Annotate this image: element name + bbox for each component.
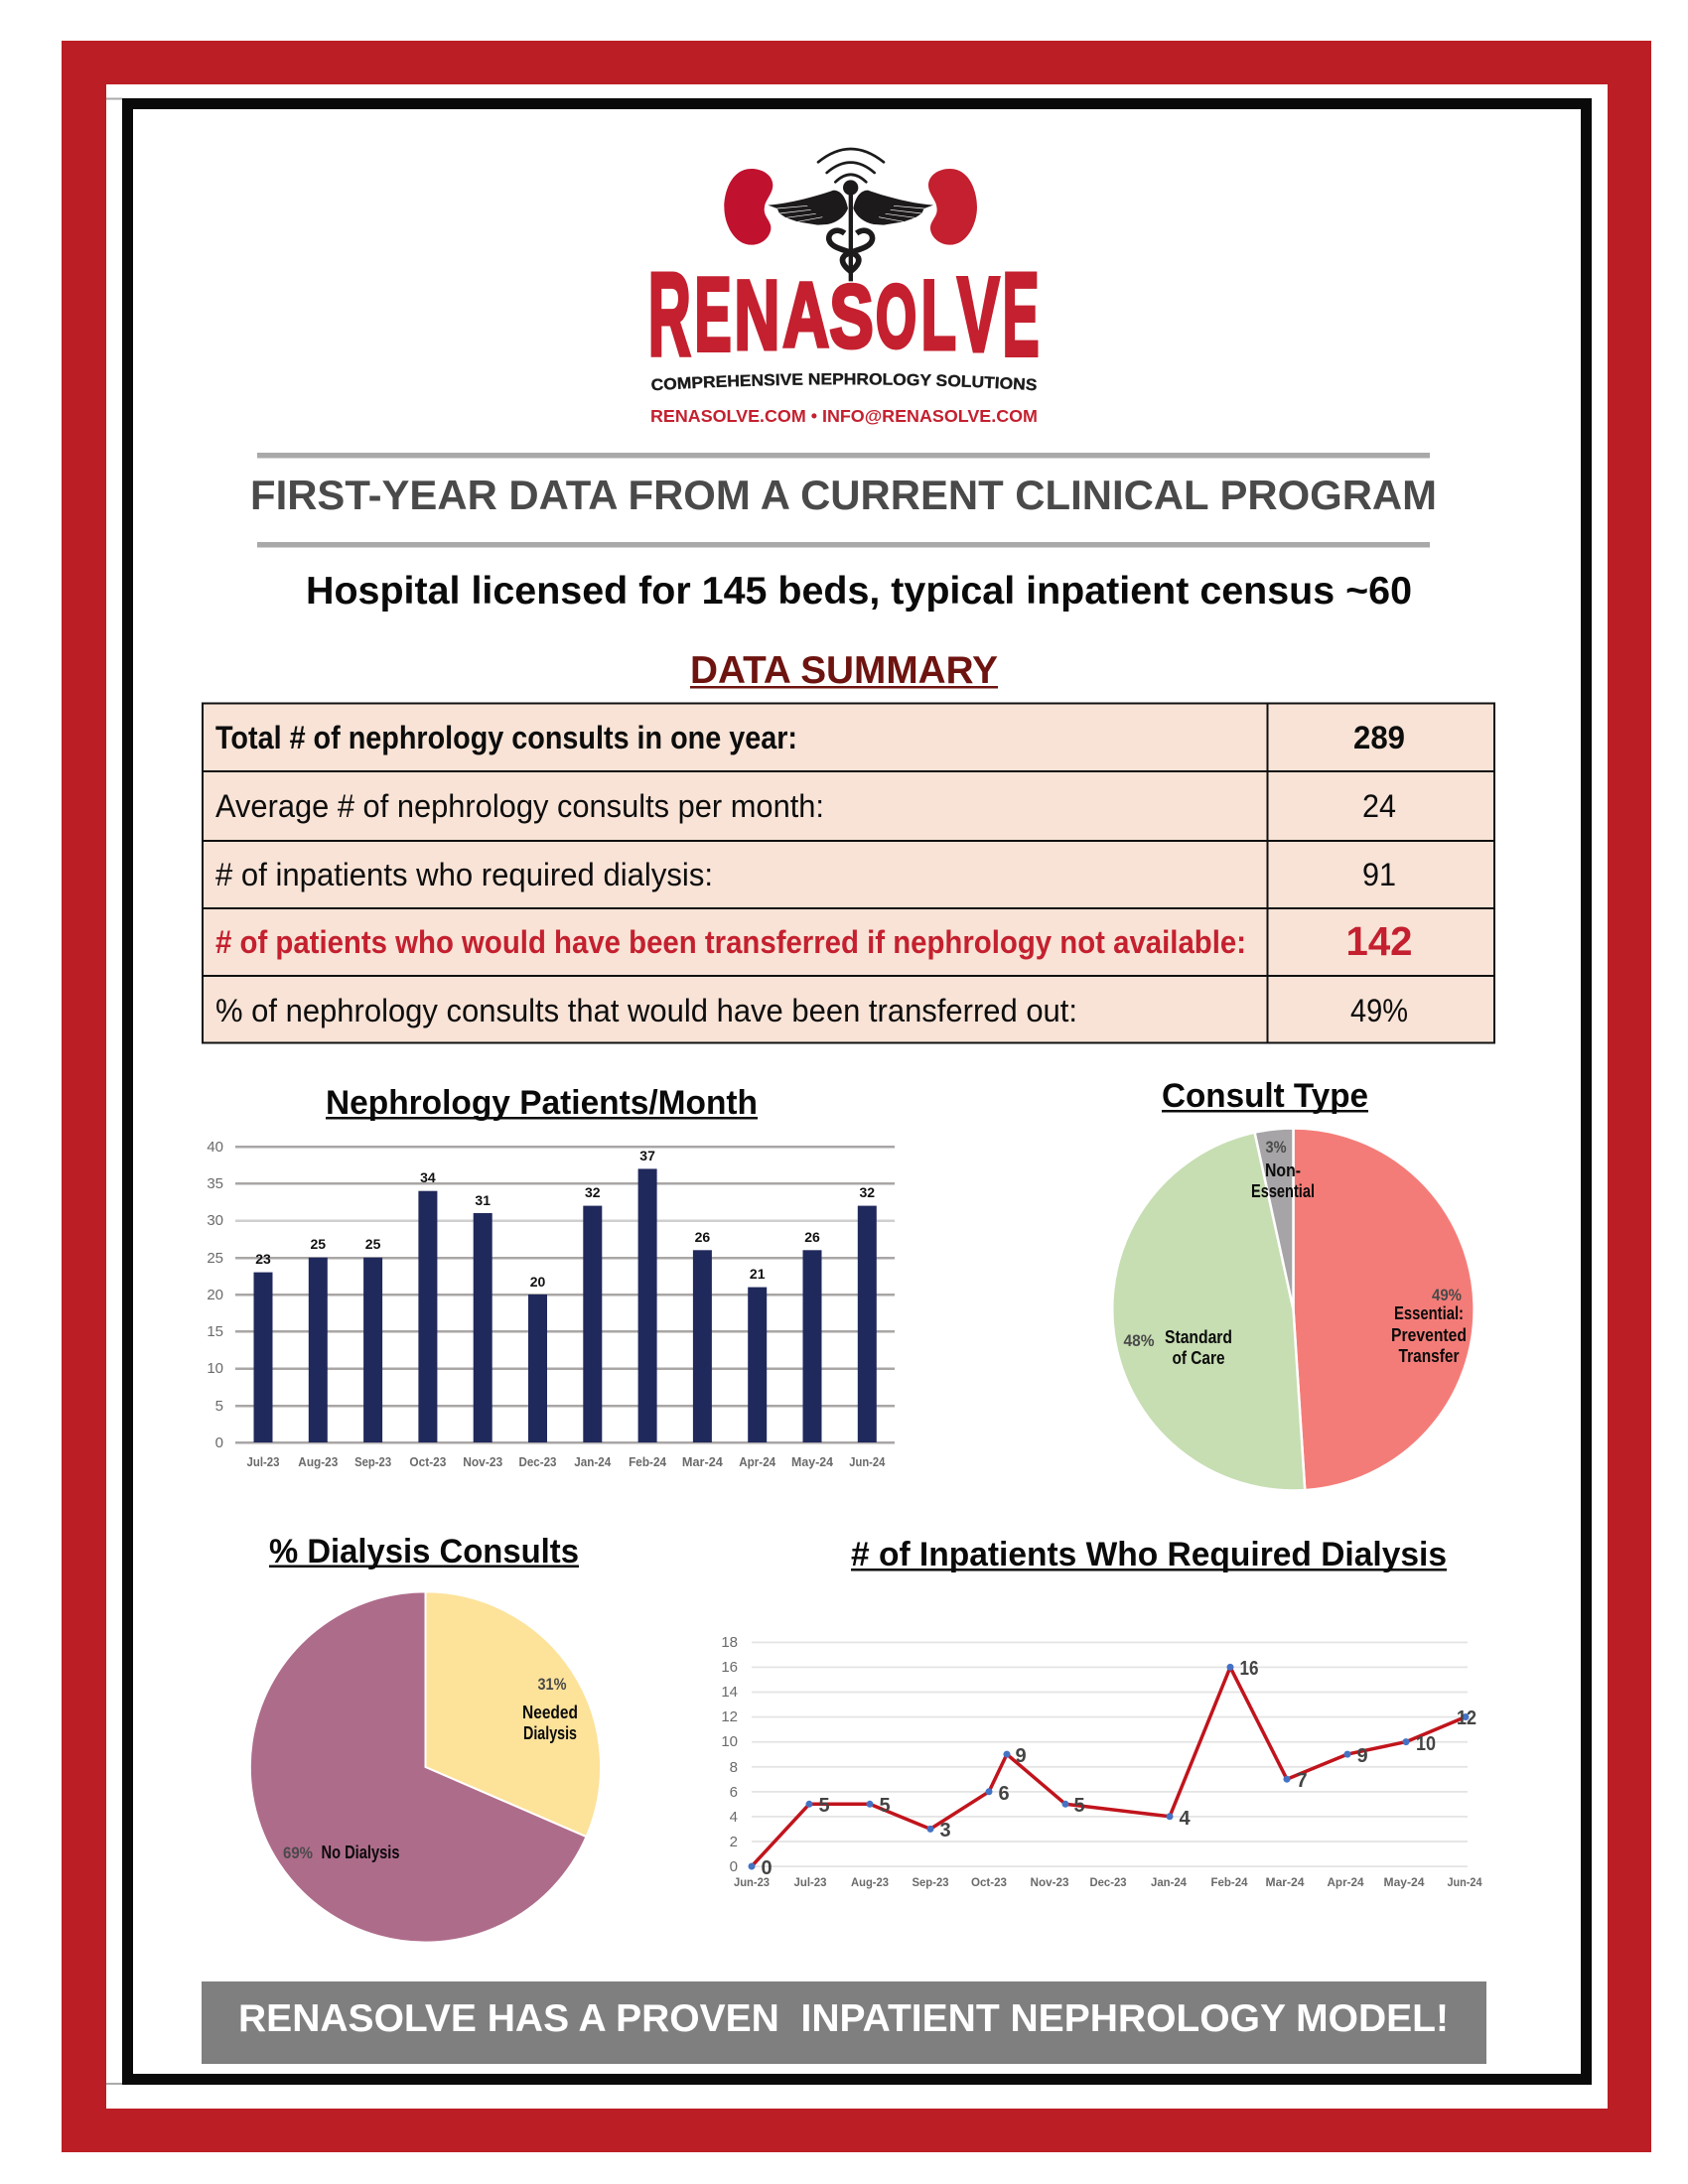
y axis labels (207, 1139, 223, 1451)
logo wordmark: O (876, 268, 916, 367)
label: no dialysis: 69% (283, 1843, 313, 1862)
data labels: 4 (1179, 1808, 1191, 1830)
month labels: Sep-23 (912, 1875, 949, 1889)
bar value labels: 25 (365, 1236, 381, 1252)
y axis labels: 14 (721, 1684, 738, 1701)
bar value labels: 31 (475, 1192, 491, 1208)
banner: proven inpatient nephrology model (202, 1981, 1486, 2064)
y axis labels: 35 (207, 1175, 223, 1192)
logo tagline: COMPREHENSIVE NEPHROLOGY SOLUTIONS (651, 373, 1037, 391)
logo wordmark: V (957, 255, 1000, 374)
data labels: 9 (1015, 1745, 1027, 1767)
label: no dialysis: No Dialysis (322, 1843, 399, 1862)
month labels (734, 1875, 1482, 1889)
y axis labels: 6 (730, 1784, 738, 1801)
bar value labels: 26 (695, 1229, 710, 1245)
label: needed dialysis (522, 1675, 578, 1743)
month labels: Jul-23 (794, 1875, 827, 1889)
row: average consults: 24 (1362, 788, 1396, 824)
label: standard of care: 48% (1124, 1331, 1154, 1350)
row: percent transferred: % of nephrology consults that would have been transferred out: (215, 993, 1077, 1028)
label: essential: Prevented (1391, 1325, 1467, 1345)
bar value labels: 32 (585, 1184, 601, 1200)
month labels: Nov-23 (1031, 1875, 1069, 1889)
y axis labels: 16 (721, 1659, 738, 1676)
month labels: Nov-23 (463, 1454, 502, 1469)
y axis labels: 12 (721, 1708, 738, 1725)
row: dialysis inpatients (215, 857, 1396, 892)
month labels: Jun-23 (734, 1875, 770, 1889)
chart title: Consult Type (1162, 1077, 1368, 1115)
label: non-essential: Non- (1265, 1160, 1301, 1180)
y axis labels: 30 (207, 1212, 223, 1229)
data summary table (203, 703, 1494, 1042)
month labels: Aug-23 (851, 1875, 889, 1889)
month labels (246, 1454, 886, 1469)
y axis labels: 5 (215, 1398, 223, 1415)
bar value labels: 32 (860, 1184, 875, 1200)
logo wordmark: S (829, 268, 874, 367)
trend line (752, 1667, 1466, 1866)
row: would have been transferred: 142 (1346, 918, 1412, 964)
chart title: % Dialysis Consults (269, 1533, 579, 1570)
heading: data summary: DATA SUMMARY (690, 649, 998, 692)
bars (254, 1168, 877, 1442)
logo contact line: RENASOLVE.COM • INFO@RENASOLVE.COM (650, 406, 1038, 426)
data points (749, 1664, 1470, 1870)
row: average consults: Average # of nephrology consults per month: (215, 788, 824, 824)
label: essential: Transfer (1398, 1346, 1460, 1366)
month labels: Sep-23 (354, 1454, 391, 1469)
label: standard of care: Standard (1165, 1327, 1232, 1347)
panel: inpatients who required dialysis (721, 1536, 1482, 1889)
bar value labels: 23 (255, 1251, 271, 1267)
data labels: 6 (998, 1783, 1010, 1805)
label: needed dialysis: Needed (522, 1703, 578, 1722)
data labels: 7 (1296, 1770, 1308, 1792)
label: standard of care: of Care (1172, 1348, 1225, 1368)
label: non-essential: 3% (1265, 1138, 1287, 1157)
month labels: May-24 (1384, 1875, 1425, 1889)
y axis labels: 25 (207, 1250, 223, 1267)
month labels: Jan-24 (574, 1454, 612, 1469)
month labels: Oct-23 (409, 1454, 446, 1469)
row: total consults (215, 720, 1405, 755)
panel: percent dialysis consults (250, 1533, 601, 1943)
month labels: Dec-23 (518, 1454, 556, 1469)
black inner frame (122, 98, 1592, 2085)
row: dialysis inpatients: 91 (1362, 857, 1396, 892)
y axis labels: 40 (207, 1139, 223, 1156)
bar value labels: 34 (420, 1169, 436, 1185)
month labels: Apr-24 (1327, 1875, 1364, 1889)
label: non-essential: Essential (1251, 1181, 1315, 1201)
label: needed dialysis: Dialysis (523, 1723, 577, 1743)
bar value labels: 26 (804, 1229, 820, 1245)
month labels: Dec-23 (1090, 1875, 1127, 1889)
data labels: 5 (1073, 1795, 1085, 1817)
month labels: Mar-24 (1265, 1875, 1305, 1889)
data labels: 9 (1356, 1745, 1368, 1767)
icon: caduceus (768, 180, 933, 281)
data labels: 12 (1457, 1707, 1477, 1729)
logo wordmark: E (694, 256, 732, 373)
y axis labels: 15 (207, 1323, 223, 1340)
panel: consult type (1112, 1077, 1475, 1490)
row: average consults (215, 788, 1396, 824)
row: total consults: Total # of nephrology consults in one year: (215, 720, 797, 755)
text: E (1002, 248, 1040, 381)
month labels: Feb-24 (629, 1454, 667, 1469)
y axis labels: 4 (730, 1809, 738, 1826)
icon: left kidney (724, 169, 773, 245)
y axis labels: 0 (215, 1434, 223, 1451)
y axis labels: 0 (730, 1858, 738, 1875)
row: total consults: 289 (1353, 720, 1405, 755)
row: percent transferred: 49% (1350, 993, 1408, 1028)
pie chart (1112, 1128, 1475, 1490)
chart title: # of Inpatients Who Required Dialysis (851, 1536, 1447, 1573)
y axis labels (721, 1634, 738, 1875)
month labels: Jun-24 (849, 1454, 886, 1469)
month labels: Oct-23 (971, 1875, 1007, 1889)
row: dialysis inpatients: # of inpatients who required dialysis: (215, 857, 713, 892)
logo wordmark: N (734, 260, 779, 370)
bar value labels: 37 (639, 1148, 655, 1163)
icon: wireless signal arcs (818, 149, 884, 182)
subheading: hospital size: Hospital licensed for 145 beds, typical inpatient census ~60 (306, 570, 1412, 613)
icon: right kidney (928, 169, 977, 245)
data labels: 5 (879, 1795, 891, 1817)
y axis labels: 8 (730, 1759, 738, 1776)
month labels: Jul-23 (246, 1454, 280, 1469)
y axis labels: 10 (207, 1360, 223, 1377)
logo wordmark: A (782, 265, 829, 366)
data labels (761, 1658, 1477, 1879)
heading: first-year data: FIRST-YEAR DATA FROM A CURRENT CLINICAL PROGRAM (250, 472, 1437, 518)
data labels: 0 (761, 1857, 773, 1879)
label: essential (1391, 1286, 1467, 1366)
month labels: Feb-24 (1211, 1875, 1248, 1889)
month labels: Mar-24 (682, 1454, 724, 1469)
month labels: May-24 (791, 1454, 834, 1469)
label: essential: 49% (1432, 1286, 1462, 1304)
bar value labels: 20 (530, 1274, 545, 1290)
data labels: 3 (939, 1820, 951, 1842)
month labels: Jun-24 (1448, 1875, 1482, 1889)
bar value labels (255, 1148, 875, 1290)
row: would have been transferred: # of patients who would have been transferred if nephrology not available: (215, 924, 1246, 960)
data labels: 5 (818, 1795, 830, 1817)
bar value labels: 21 (750, 1266, 766, 1282)
y axis labels: 2 (730, 1834, 738, 1850)
month labels: Aug-23 (298, 1454, 338, 1469)
month labels: Jan-24 (1151, 1875, 1187, 1889)
month labels: Apr-24 (739, 1454, 776, 1469)
label: standard of care (1124, 1327, 1232, 1368)
label: non-essential (1251, 1138, 1315, 1201)
chart title: Nephrology Patients/Month (326, 1084, 758, 1122)
label: needed dialysis: 31% (538, 1675, 566, 1694)
label: no dialysis (283, 1843, 399, 1862)
data labels: 10 (1416, 1733, 1436, 1755)
label: essential: Essential: (1394, 1303, 1464, 1323)
pie chart (250, 1591, 601, 1943)
logo wordmark: L (921, 260, 956, 370)
bar value labels: 25 (311, 1236, 326, 1252)
logo wordmark: R (648, 248, 691, 381)
data labels: 16 (1239, 1658, 1259, 1680)
y axis labels: 18 (721, 1634, 738, 1651)
y axis labels: 10 (721, 1733, 738, 1750)
logo (648, 147, 1040, 426)
panel: nephrology patients per month (207, 1084, 895, 1469)
banner: proven inpatient nephrology model: RENASOLVE HAS A PROVEN INPATIENT NEPHROLOGY MODEL! (238, 1997, 1449, 2040)
y axis labels: 20 (207, 1287, 223, 1303)
